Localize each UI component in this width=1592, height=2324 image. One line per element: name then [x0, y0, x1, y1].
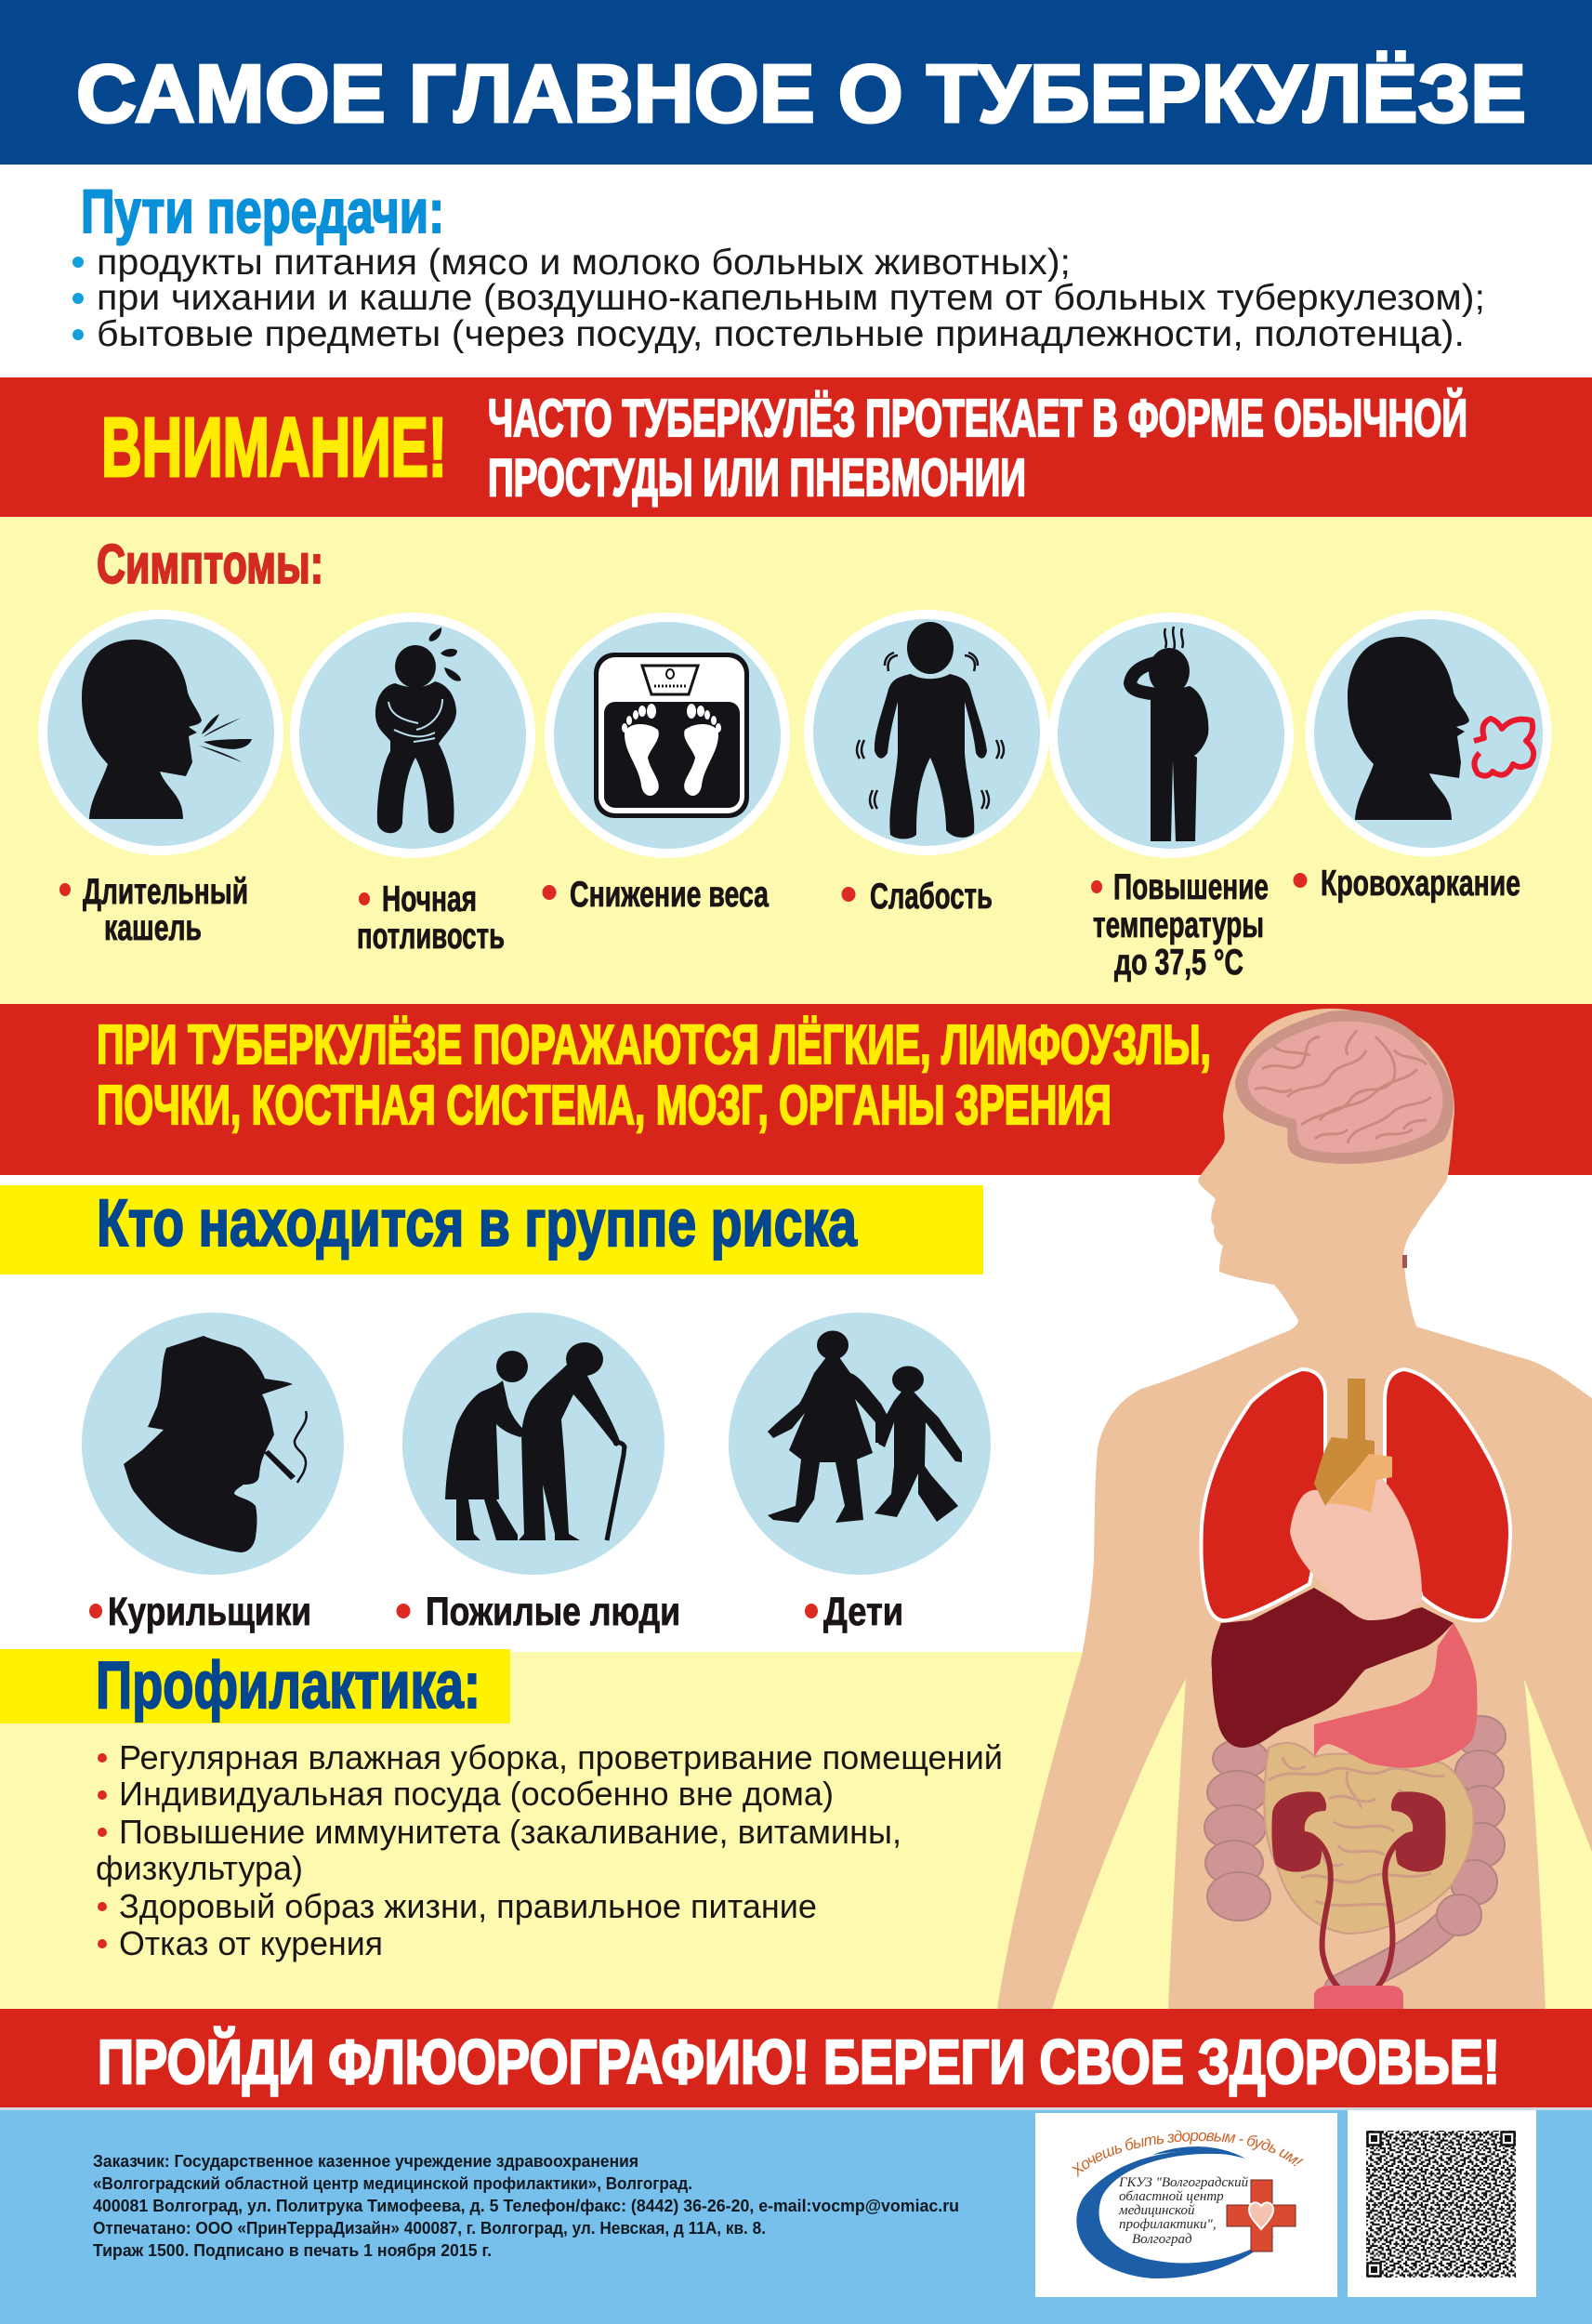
label: smokers: Курильщики	[108, 1590, 311, 1634]
panel: footer	[0, 2107, 1592, 2324]
panel: prevention background	[0, 1652, 1592, 2009]
heading: symptoms: Симптомы:	[97, 534, 323, 595]
panel: affected organs banner	[0, 1004, 1592, 1175]
prevention list: физкультура)	[96, 1849, 303, 1887]
kidneys and ureters	[1271, 1791, 1446, 1989]
liver	[1211, 1588, 1454, 1748]
label: fever: температуры	[1093, 905, 1264, 945]
transmission list: продукты питания (мясо и молоко больных животных);	[97, 243, 1071, 283]
heading: transmission: Пути передачи:	[81, 177, 444, 245]
label: weight loss: Снижение веса	[570, 875, 769, 915]
icon: night sweats	[290, 613, 535, 858]
bladder	[1314, 1986, 1403, 2009]
imprint text	[93, 2152, 959, 2260]
panel: call to action	[0, 2009, 1592, 2107]
imprint text: 400081 Волгоград, ул. Политрука Тимофеева, д. 5 Телефон/факс: (8442) 36-26-20, e-mail:vocmp@vomiac.ru	[93, 2197, 959, 2215]
organs message	[97, 1014, 1211, 1136]
icon: fever	[1048, 613, 1294, 858]
trachea and aorta	[1314, 1379, 1392, 1512]
icon: hemoptysis	[1305, 610, 1552, 857]
label: night sweats: Ночная	[382, 879, 477, 919]
prevention list: Регулярная влажная уборка, проветривание помещений	[119, 1738, 1003, 1776]
label: children: Дети	[823, 1590, 903, 1634]
attention word: ВНИМАНИЕ!	[101, 402, 447, 495]
logo: медицинской	[1118, 2203, 1195, 2218]
label: night sweats	[357, 879, 505, 957]
label: weakness: Слабость	[870, 877, 993, 917]
label: hemoptysis: Кровохаркание	[1321, 864, 1520, 904]
lungs	[1201, 1369, 1510, 1620]
brain	[1235, 1010, 1454, 1164]
attention message	[488, 388, 1467, 508]
lymph node	[1402, 1255, 1407, 1268]
risk labels	[89, 1590, 903, 1634]
label: fever: Повышение	[1113, 867, 1269, 907]
transmission list: бытовые предметы (через посуду, постельные принадлежности, полотенца).	[97, 314, 1465, 354]
label: hemoptysis	[1294, 864, 1520, 904]
transmission list	[72, 243, 1485, 354]
transmission list: при чихании и кашле (воздушно-капельным путем от больных туберкулезом);	[97, 278, 1485, 318]
large intestine	[1204, 1716, 1506, 1989]
panel: attention banner	[0, 377, 1592, 517]
logo: Волгоград	[1132, 2232, 1192, 2247]
logo: областной центр	[1119, 2189, 1224, 2204]
prevention list: Индивидуальная посуда (особенно вне дома)	[119, 1775, 834, 1813]
label: fever: до 37,5 °С	[1114, 943, 1243, 983]
heart	[1290, 1473, 1422, 1620]
imprint text: Заказчик: Государственное казенное учреждение здравоохранения	[93, 2152, 638, 2171]
icon: weakness	[804, 610, 1049, 855]
title: САМОЕ ГЛАВНОЕ О ТУБЕРКУЛЁЗЕ	[76, 47, 1526, 139]
imprint text: Отпечатано: ООО «ПринТерраДизайн» 400087, г. Волгоград, ул. Невская, д 11А, кв. 8.	[93, 2219, 766, 2238]
attention message: ПРОСТУДЫ ИЛИ ПНЕВМОНИИ	[488, 448, 1026, 508]
anatomy illustration	[997, 1009, 1592, 2009]
panel: symptoms	[0, 517, 1592, 1004]
icon: cough	[38, 610, 283, 855]
stomach	[1314, 1623, 1477, 1768]
heading: risk groups	[0, 1185, 983, 1274]
prevention list: Здоровый образ жизни, правильное питание	[119, 1887, 817, 1925]
QR code	[1348, 2110, 1536, 2297]
icon: smoker	[82, 1313, 344, 1575]
prevention list	[96, 1738, 1003, 1962]
logo: ГКУЗ "Волгоградский	[1118, 2175, 1249, 2190]
small intestine	[1264, 1743, 1474, 1934]
organs message: ПОЧКИ, КОСТНАЯ СИСТЕМА, МОЗГ, ОРГАНЫ ЗРЕНИЯ	[97, 1075, 1112, 1136]
label: night sweats: потливость	[357, 917, 505, 957]
symptom labels	[59, 864, 1520, 983]
panel: risk groups	[0, 1185, 991, 1634]
panel: transmission routes	[72, 177, 1485, 354]
prevention list: Повышение иммунитета (закаливание, витамины,	[119, 1813, 901, 1851]
label: elderly: Пожилые люди	[426, 1590, 680, 1634]
logo	[1035, 2113, 1337, 2297]
icon: weight scale	[545, 613, 790, 858]
header band	[0, 0, 1592, 165]
label: weight loss	[543, 875, 769, 915]
label: weakness	[842, 877, 993, 917]
label: long cough: Длительный	[83, 872, 248, 912]
body silhouette	[997, 1009, 1592, 2009]
panel: prevention	[0, 1649, 1003, 1962]
imprint text: Тираж 1500. Подписано в печать 1 ноября 2015 г.	[93, 2241, 492, 2260]
label: fever	[1091, 867, 1269, 983]
icon: elderly	[402, 1313, 664, 1575]
logo: Хочешь быть здоровым - будь им!	[1072, 2131, 1303, 2177]
prevention list: Отказ от курения	[119, 1924, 383, 1962]
heading: prevention	[0, 1649, 510, 1723]
logo: профилактики",	[1119, 2217, 1217, 2232]
label: long cough: кашель	[104, 908, 202, 948]
heading: prevention: Профилактика:	[96, 1649, 480, 1723]
imprint text: «Волгоградский областной центр медицинской профилактики», Волгоград.	[93, 2174, 692, 2193]
icon: children	[729, 1313, 991, 1575]
label: long cough	[59, 872, 248, 948]
heading: risk groups: Кто находится в группе риска	[97, 1187, 857, 1261]
